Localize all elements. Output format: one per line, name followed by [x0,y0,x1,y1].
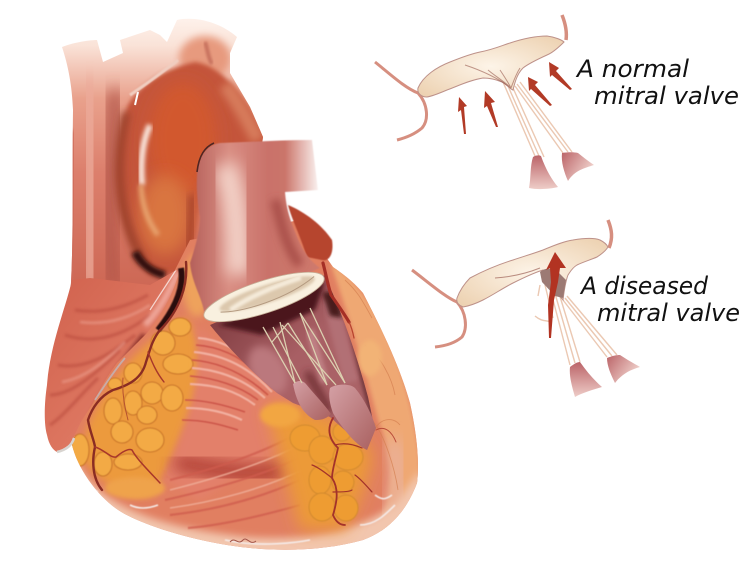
right fat pad [260,403,372,530]
papillary muscles [570,362,602,397]
right auricle [288,205,333,260]
chordae [503,82,572,157]
lower pale band [80,466,418,550]
pulmonary artery [190,132,322,318]
orange behind pulmonary artery [182,252,204,318]
cutaway chamber [210,275,376,450]
aorta [117,62,270,275]
right atrium [44,266,185,454]
pale fibrous highlights [96,489,396,546]
wall tissue [412,270,465,347]
label: normal valve: A normal [575,55,689,83]
papillary muscles [293,381,331,420]
upper aorta branch tint [179,36,231,80]
leaflet [418,36,564,97]
great vessels [62,18,263,286]
wall tissue [375,62,427,140]
muscle stripes [165,325,305,528]
mitral valve ring [199,262,329,332]
leaflet [457,238,608,307]
vena cava shading [88,80,91,290]
artist signature [230,539,256,542]
label: diseased valve [579,272,740,327]
chordae [263,308,345,385]
right pale wash [330,262,420,540]
regurgitant arrow [546,252,566,338]
label: diseased valve: A diseased [579,272,709,300]
papillary muscles [529,155,558,189]
normal mitral valve diagram [375,15,594,189]
heart illustration [44,18,418,550]
diseased mitral valve diagram [412,220,640,397]
label: diseased valve: mitral valve [597,299,740,327]
flow arrows [458,62,572,134]
coronary arteries [88,262,396,525]
chordae [535,285,617,365]
leaflet folds [465,65,520,88]
leaflet tear [495,268,540,278]
left fat pad [71,318,201,499]
ventricle base [72,221,418,550]
label: normal valve [575,55,739,110]
label: normal valve: mitral valve [594,82,739,110]
